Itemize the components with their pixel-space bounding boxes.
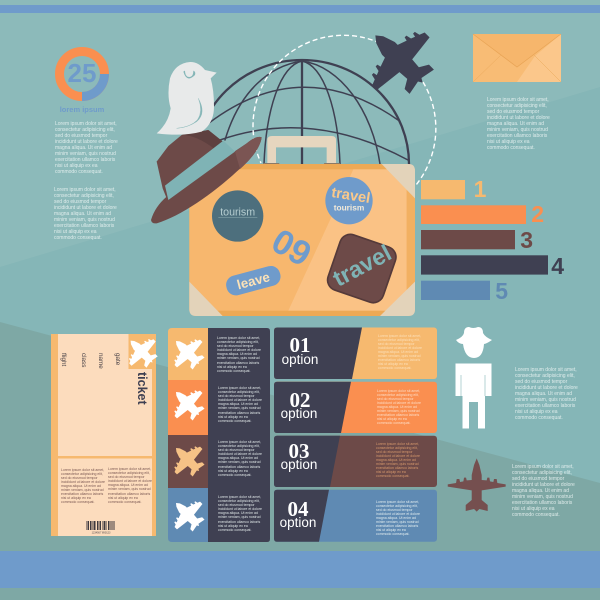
donut chart <box>60 52 109 114</box>
panel: option 02 <box>274 382 437 433</box>
ticket labels: gate <box>114 353 121 366</box>
text block: option 04: magna aliqua. Ut enim ad <box>376 516 416 520</box>
text block: option 01: Lorem ipsum dolor sit amet, <box>378 334 421 338</box>
text block: envelope: sed do eiusmod tempor <box>487 109 539 115</box>
text block: ticket left: sed do eiusmod tempor <box>61 476 98 480</box>
text block: option 04: incididunt ut labore et dolore <box>376 512 420 516</box>
text block: option 04 <box>376 500 420 536</box>
icon: plane top <box>349 9 449 109</box>
text block: plane list 4: sed do eiusmod tempor <box>218 503 255 507</box>
icon: plane 4 <box>163 490 212 539</box>
text block: option 03: nisi ut aliquip ex ea <box>376 470 406 474</box>
text block: option 03: exercitation ullamco laboris <box>376 466 418 470</box>
text block: option 02: magna aliqua. Ut enim ad <box>377 405 417 409</box>
text block: plane: minim veniam, quis nostrud <box>512 494 573 500</box>
text block: plane list 1: commodo consequat. <box>217 369 250 373</box>
text block: plane list 2: magna aliqua. Ut enim ad <box>218 402 258 406</box>
text block: ticket left: magna aliqua. Ut enim ad <box>61 484 101 488</box>
panel: option 04: option <box>280 515 316 530</box>
text block: person: sed do eiusmod tempor <box>515 378 567 384</box>
ticket labels <box>60 353 149 405</box>
barcode <box>87 521 114 530</box>
envelope icon <box>473 34 561 82</box>
text block: option 03: minim veniam, quis nostrud <box>376 462 419 466</box>
top bar <box>0 5 600 13</box>
panel: option 01: option <box>282 352 318 367</box>
sticker: travel tourism: travel <box>330 185 371 207</box>
text block: plane: consectetur adipisicing elit, <box>512 470 572 476</box>
text block: person: nisi ut aliquip ex ea <box>515 408 558 414</box>
text block: option 01: magna aliqua. Ut enim ad <box>378 350 418 354</box>
text block: option 03: commodo consequat. <box>376 474 409 478</box>
text block: envelope: commodo consequat. <box>487 145 535 151</box>
text block: plane list 3 <box>218 440 262 477</box>
sticker: travel <box>325 231 399 306</box>
text block: left top <box>55 120 118 174</box>
text block: plane list 2: exercitation ullamco laboris <box>218 411 260 415</box>
text block: option 02: commodo consequat. <box>377 421 410 425</box>
text block: plane: commodo consequat. <box>512 512 560 518</box>
text block: person: commodo consequat. <box>515 414 563 420</box>
text block: plane list 2: sed do eiusmod tempor <box>218 394 255 398</box>
text block: person: magna aliqua. Ut enim ad <box>515 390 572 396</box>
text block: ticket right: commodo consequat. <box>108 500 141 504</box>
text block: left lower: magna aliqua. Ut enim ad <box>54 210 111 216</box>
text block: plane list 1: nisi ut aliquip ex ea <box>217 365 247 369</box>
text block: plane list 3: incididunt ut labore et dolore <box>218 452 262 456</box>
text block: left lower: consectetur adipisicing elit, <box>54 192 114 198</box>
text block: option 03: sed do eiusmod tempor <box>376 450 413 454</box>
text block: option 03: incididunt ut labore et dolore <box>376 454 420 458</box>
panel: option 02: 02 <box>290 388 310 412</box>
text block: plane list 4: Lorem ipsum dolor sit amet, <box>218 495 261 499</box>
text block: envelope: nisi ut aliquip ex ea <box>487 139 530 145</box>
text block: envelope: magna aliqua. Ut enim ad <box>487 121 544 127</box>
text block: ticket right: minim veniam, quis nostrud <box>108 487 151 491</box>
text block: option 03: consectetur adipisicing elit, <box>376 446 418 450</box>
text block: ticket left: commodo consequat. <box>61 500 94 504</box>
text block: option 02: sed do eiusmod tempor <box>377 397 414 401</box>
text block: person: minim veniam, quis nostrud <box>515 396 576 402</box>
icon: brown plane <box>448 458 506 512</box>
text block: left top: nisi ut aliquip ex ea <box>55 162 98 168</box>
text block: left lower: minim veniam, quis nostrud <box>54 216 115 222</box>
bar chart: 3 <box>520 227 533 253</box>
sticker: tourism: tourism <box>220 207 255 219</box>
sticker: travel tourism: tourism <box>334 203 364 213</box>
sticker: 09: 09 <box>265 222 317 274</box>
text block: plane list 2: commodo consequat. <box>218 419 251 423</box>
text block: ticket right: incididunt ut labore et dolore <box>108 479 152 483</box>
text block: option 01: nisi ut aliquip ex ea <box>378 362 408 366</box>
text block: left top: magna aliqua. Ut enim ad <box>55 144 112 150</box>
text block: ticket right: nisi ut aliquip ex ea <box>108 496 138 500</box>
text block: envelope: exercitation ullamco laboris <box>487 133 547 139</box>
globe <box>195 60 409 164</box>
panel: option 04 <box>274 490 437 542</box>
text block: plane list 2: Lorem ipsum dolor sit amet, <box>218 386 261 390</box>
text block: plane: Lorem ipsum dolor sit amet, <box>512 464 574 470</box>
text block: option 02 <box>377 388 421 425</box>
donut chart: 25 <box>68 58 96 88</box>
sticker: travel: travel <box>328 239 396 292</box>
text block: option 04: nisi ut aliquip ex ea <box>376 528 406 532</box>
text block: option 03: Lorem ipsum dolor sit amet, <box>376 442 419 446</box>
text block: option 03 <box>376 442 420 478</box>
text block: plane list 4: commodo consequat. <box>218 528 251 532</box>
text block: option 04: exercitation ullamco laboris <box>376 524 418 528</box>
text block: plane list 3: magna aliqua. Ut enim ad <box>218 456 258 460</box>
text block: person: exercitation ullamco laboris <box>515 402 575 408</box>
text block: person <box>515 366 578 420</box>
text block: option 01: consectetur adipisicing elit, <box>378 338 420 342</box>
text block: ticket right: exercitation ullamco laboris <box>108 492 150 496</box>
ticket labels: name <box>97 353 104 369</box>
ticket <box>51 328 165 536</box>
text block: option 01: sed do eiusmod tempor <box>378 342 415 346</box>
text block: option 02: incididunt ut labore et dolore <box>377 401 421 405</box>
bar chart: 1 <box>474 176 487 202</box>
suitcase handle <box>263 136 340 166</box>
text block: plane list 1: exercitation ullamco laboris <box>217 361 259 365</box>
text block: plane list 1: incididunt ut labore et dolore <box>217 348 261 352</box>
ticket labels: ticket <box>135 372 149 405</box>
text block: left lower: nisi ut aliquip ex ea <box>54 228 97 234</box>
text block: left top: minim veniam, quis nostrud <box>55 150 116 156</box>
panel: option 03 <box>274 436 437 487</box>
text block: left lower <box>54 186 117 240</box>
panel: option 01: 01 <box>290 333 310 357</box>
text block: option 02: exercitation ullamco laboris <box>377 413 419 417</box>
text block: plane list 1: magna aliqua. Ut enim ad <box>217 352 257 356</box>
text block: option 02: nisi ut aliquip ex ea <box>377 417 407 421</box>
text block: plane list 3: sed do eiusmod tempor <box>218 448 255 452</box>
text block: left top: sed do eiusmod tempor <box>55 132 107 138</box>
icon: person with hat <box>456 327 492 428</box>
sticker: leave <box>224 264 283 297</box>
text block: left lower: exercitation ullamco laboris <box>54 222 114 228</box>
text block: option 04: commodo consequat. <box>376 532 409 536</box>
sticker: tourism <box>212 190 263 242</box>
panel: option 03: option <box>281 457 317 472</box>
icon: plane 3 <box>163 435 212 484</box>
text block: person: consectetur adipisicing elit, <box>515 372 575 378</box>
text block: option 01: exercitation ullamco laboris <box>378 358 420 362</box>
text block: option 01: minim veniam, quis nostrud <box>378 354 421 358</box>
text block: option 02: minim veniam, quis nostrud <box>377 409 420 413</box>
text block: plane list 1: sed do eiusmod tempor <box>217 344 254 348</box>
text block: left top: exercitation ullamco laboris <box>55 156 115 162</box>
text block: plane list 3: commodo consequat. <box>218 473 251 477</box>
text block: left lower: commodo consequat. <box>54 234 102 240</box>
sticker: travel tourism <box>325 177 373 224</box>
bar chart <box>421 176 564 304</box>
text block: ticket left: Lorem ipsum dolor sit amet, <box>61 468 104 472</box>
panel: option 02: option <box>281 406 317 421</box>
text block: plane list 4: consectetur adipisicing elit, <box>218 499 260 503</box>
text block: option 01: incididunt ut labore et dolore <box>378 346 422 350</box>
icon: plane 1 <box>163 328 212 377</box>
text block: ticket right <box>108 467 152 504</box>
text block: ticket right: Lorem ipsum dolor sit amet, <box>108 467 151 471</box>
text block: plane list 1: consectetur adipisicing elit, <box>217 340 259 344</box>
bar chart: 4 <box>551 253 564 279</box>
text block: plane list 3: nisi ut aliquip ex ea <box>218 469 248 473</box>
text block: ticket left: exercitation ullamco laboris <box>61 492 103 496</box>
text block: ticket right: sed do eiusmod tempor <box>108 475 145 479</box>
text block: plane: incididunt ut labore et dolore <box>512 482 575 488</box>
text block: option 04: consectetur adipisicing elit, <box>376 504 418 508</box>
text block: plane list 4: nisi ut aliquip ex ea <box>218 524 248 528</box>
text block: plane <box>512 464 575 518</box>
panel: option 01 <box>274 328 437 379</box>
text block: plane list 4: minim veniam, quis nostrud <box>218 515 261 519</box>
text block: plane list 2: incididunt ut labore et dolore <box>218 398 262 402</box>
text block: option 01: commodo consequat. <box>378 366 411 370</box>
text block: option 02: Lorem ipsum dolor sit amet, <box>377 388 420 392</box>
text block: option 04: Lorem ipsum dolor sit amet, <box>376 500 419 504</box>
ticket labels: flight <box>60 353 67 367</box>
text block: plane list 4: exercitation ullamco laboris <box>218 520 260 524</box>
text block: plane list 2: nisi ut aliquip ex ea <box>218 415 248 419</box>
text block: plane list 2: minim veniam, quis nostrud <box>218 406 261 410</box>
text block: plane list 2 <box>218 386 262 423</box>
text block: plane list 3: consectetur adipisicing elit, <box>218 444 260 448</box>
ticket labels: class <box>80 353 87 367</box>
text block: plane list 2: consectetur adipisicing elit, <box>218 390 260 394</box>
text block: plane list 4: magna aliqua. Ut enim ad <box>218 511 258 515</box>
text block: plane: sed do eiusmod tempor <box>512 476 564 482</box>
icon: plane 2 <box>163 379 212 428</box>
text block: plane list 3: minim veniam, quis nostrud <box>218 460 261 464</box>
suitcase illustration <box>151 62 415 316</box>
text block: person: Lorem ipsum dolor sit amet, <box>515 366 577 372</box>
text block: plane: exercitation ullamco laboris <box>512 500 572 506</box>
text block: envelope: consectetur adipisicing elit, <box>487 103 547 109</box>
panel: option 03: 03 <box>288 439 310 463</box>
bottom bar <box>0 551 600 588</box>
text block: plane list 1: minim veniam, quis nostrud <box>217 356 260 360</box>
text block: ticket left: consectetur adipisicing elit, <box>61 472 103 476</box>
text block: plane list 4: incididunt ut labore et dolore <box>218 507 262 511</box>
hat <box>151 130 262 223</box>
text block: envelope: minim veniam, quis nostrud <box>487 127 548 133</box>
bar chart: 2 <box>531 201 544 227</box>
text block: plane list 4 <box>218 495 262 532</box>
text block: plane list 1: Lorem ipsum dolor sit amet, <box>217 336 260 340</box>
text block: left lower: Lorem ipsum dolor sit amet, <box>54 186 116 192</box>
text block: option 02: consectetur adipisicing elit, <box>377 393 419 397</box>
text block: person: incididunt ut labore et dolore <box>515 384 578 390</box>
text block: option 04: minim veniam, quis nostrud <box>376 520 419 524</box>
sticker: leave: leave <box>235 269 271 292</box>
text block: ticket left <box>61 468 105 504</box>
text block: envelope: Lorem ipsum dolor sit amet, <box>487 97 549 103</box>
text block: left lower: incididunt ut labore et dolore <box>54 204 117 210</box>
bar chart: 5 <box>495 278 508 304</box>
text block: envelope <box>487 97 550 151</box>
text block: option 01 <box>378 334 422 370</box>
dashed flight path <box>253 35 436 185</box>
text block: left top: Lorem ipsum dolor sit amet, <box>55 120 117 126</box>
donut chart: lorem ipsum <box>60 105 105 114</box>
icon: ticket plane <box>118 328 165 375</box>
text block: left top: commodo consequat. <box>55 168 103 174</box>
bird <box>157 62 217 135</box>
text block: plane: magna aliqua. Ut enim ad <box>512 488 569 494</box>
panel: plane list <box>163 328 270 542</box>
text block: envelope: incididunt ut labore et dolore <box>487 115 550 121</box>
text block: plane list 3: exercitation ullamco laboris <box>218 465 260 469</box>
text block: ticket right: consectetur adipisicing elit, <box>108 471 150 475</box>
text block: left top: incididunt ut labore et dolore <box>55 138 118 144</box>
text block: ticket left: nisi ut aliquip ex ea <box>61 496 91 500</box>
panel: option 04: 04 <box>288 497 309 521</box>
text block: option 03: magna aliqua. Ut enim ad <box>376 458 416 462</box>
text block: plane list 1 <box>217 336 261 373</box>
text block: ticket left: incididunt ut labore et dolore <box>61 480 105 484</box>
ticket: 1234567 890123 <box>92 532 111 534</box>
text block: option 04: sed do eiusmod tempor <box>376 508 413 512</box>
suitcase body <box>189 164 415 316</box>
text block: left lower: sed do eiusmod tempor <box>54 198 106 204</box>
text block: plane list 3: Lorem ipsum dolor sit amet, <box>218 440 261 444</box>
text block: ticket left: minim veniam, quis nostrud <box>61 488 104 492</box>
text block: plane: nisi ut aliquip ex ea <box>512 506 555 512</box>
text block: ticket right: magna aliqua. Ut enim ad <box>108 483 148 487</box>
text block: left top: consectetur adipisicing elit, <box>55 126 115 132</box>
